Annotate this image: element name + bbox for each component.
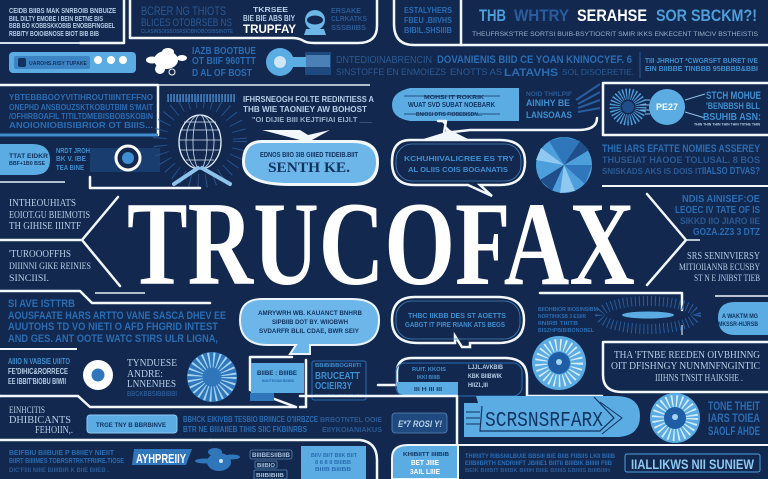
bubble: blue callout xyxy=(392,88,597,140)
small blue tab: TTAT EIDKR xyxy=(9,154,49,160)
bottom row serif xyxy=(9,405,73,436)
outlined box: BOCIIBIBHBIBOBABS xyxy=(315,393,363,398)
panel: bottom light tab: BET JIIIE xyxy=(411,460,439,467)
blue tab: right: A WAKTM MG xyxy=(722,314,758,320)
blue tab: right: MKSSR-HIJRSB xyxy=(718,322,759,328)
hatch bar xyxy=(166,94,235,102)
panel: starburst and node xyxy=(603,83,768,135)
button: TRGE TNY B BBRBINVE xyxy=(96,422,167,429)
bubble: bottom dark: GABGT IT PIRE RIANK ATS BEGS xyxy=(405,320,505,329)
intro text row: ENOTTS AS xyxy=(450,67,502,77)
small blue text and ring icon: TEA BINE xyxy=(56,165,84,172)
bottom right paragraph xyxy=(465,454,616,474)
bottom row texts: BRBOTNTEL OOIE xyxy=(320,415,382,424)
headline: SERAHSE xyxy=(577,6,647,25)
bottom row texts: EIIYKOIANIAKUS xyxy=(322,425,382,434)
outlined box xyxy=(0,358,602,407)
panel: starburst and node: BSUHIB ASN: xyxy=(703,112,761,123)
icon: lower radial dial xyxy=(650,393,700,443)
small text with ellipse and rays: IINIRB TIIITB xyxy=(538,321,578,327)
top box: right text stack: ESTALYHERS xyxy=(404,6,453,15)
left blue paragraph: AUUTOHS TD VO NIETI O AFD FHGRID INTEST xyxy=(8,321,218,333)
icon: white ring xyxy=(83,360,113,390)
bottom row serif: FEHOIIN,. xyxy=(35,425,73,436)
top panel: Trupfay: SSSBIIBS xyxy=(331,25,366,32)
serif label stack: LNNENHES xyxy=(127,378,176,390)
small blue tab: BBF+1B0 BSE xyxy=(9,161,46,167)
icon: node with chart xyxy=(266,48,331,76)
serif label stack xyxy=(127,357,177,398)
badge: Ayhpreiiy: AYHPREIIY xyxy=(136,451,186,466)
headline: THEUFRSKS'TRE SORTSI BUIB-BSYTIOCRIT SMIR IKKS ENKECENT TIMCIV BSTHEISTIS xyxy=(472,31,759,38)
icon: white splat xyxy=(146,48,187,75)
left chevron with text: EOIOT.GU BIEIMOTIS xyxy=(9,210,90,221)
left chevron with text: TH GIHISE IIINTF xyxy=(9,221,81,232)
bottom row serif: DHIBICANTS xyxy=(9,415,71,426)
top-left text panel: RBBITY BOIOIBNOSE BIOT BIB BIB xyxy=(9,31,99,38)
icon: upper radial dial xyxy=(532,336,586,390)
bottom row texts xyxy=(183,415,382,434)
bubble: Senth Ke: SENTH KE. xyxy=(268,160,350,176)
top panel: Trupfay: CLASINSOISBOSRSIOBNOBOSIBSINOTE xyxy=(141,29,234,35)
small text with ellipse and rays: BIIOHBIOR IIIOSINSIBM xyxy=(538,307,598,313)
small text with ellipse and rays: NORTIHIKSB 3 ESIIR xyxy=(538,314,586,320)
outlined tag stack: BIIBIO xyxy=(257,463,275,469)
small blue text left lower: EE IBBIT'BIOBU BIWII xyxy=(8,377,66,386)
blue rectangle: 8 8 8 8 BIIIBB xyxy=(315,460,351,466)
pie chart xyxy=(536,137,592,193)
blue tab: right xyxy=(715,296,768,335)
blue stack right xyxy=(708,399,760,438)
serif label stack: TYNDUESE xyxy=(127,357,177,369)
small blue text left lower: AIIIO N VABSIE UIIITO xyxy=(8,357,70,366)
bubble: blue callout: WUAT SVD SUBAT NOEBARK xyxy=(408,102,495,109)
small blue text and ring icon xyxy=(56,146,160,172)
rounded box with labels: LJJL.AVKBIB xyxy=(468,364,503,371)
right chevron with text: NDIS AINISEF:OE xyxy=(682,194,760,205)
icon: globe with propeller xyxy=(90,101,240,188)
small blue text and ring icon: BK V. IBE xyxy=(56,156,86,163)
small blue text and ring icon: NRDT JROH xyxy=(56,148,90,155)
bubble: dark outlined xyxy=(392,140,525,196)
blue text trio: OT BIIF 960TTT xyxy=(192,56,256,67)
blue rectangle: BIIIB BIIIBB xyxy=(315,467,352,473)
blue text beside callout: NOID THRLPIF xyxy=(526,92,572,98)
left text panel: ANOIONIOBISIBRIOR OT BIIIS... xyxy=(9,120,153,130)
bubble: blue callout: MOHSI IT ROKRIK xyxy=(424,95,485,101)
intro text row xyxy=(336,52,758,79)
right text block: THUSEIAT HAOOE TOLUSAL. 8 BOS xyxy=(602,155,760,166)
headline: WHTRY xyxy=(514,6,570,25)
badge: Ayhpreiiy xyxy=(132,449,192,466)
blue text trio xyxy=(192,46,256,79)
left info bar: UAROHS.RISY TUPAKE xyxy=(29,61,88,67)
outlined tag stack: BIIIBESIIBIIB xyxy=(252,453,291,459)
left info bar xyxy=(9,52,136,73)
rounded box with labels: III H III III xyxy=(414,387,443,393)
rounded box with labels: IKKI BIIIB xyxy=(417,375,440,381)
intro text row: SOL DISOERETIE. xyxy=(562,68,634,77)
bottom row serif: EINHCITIS xyxy=(9,405,45,415)
top panel: Trupfay: TKRSEE xyxy=(253,7,288,14)
outlined box: BRUCEATT xyxy=(315,371,360,382)
left text panel: /OFHIRBOAFIL TITILTDMEBISBOBSKOBIN xyxy=(9,111,153,121)
top-left text panel: CEIDB BIIBS MAK SNRBOIB BNBUIZE xyxy=(9,8,116,15)
left chevron with text: 'TUROOOFFHS xyxy=(9,249,71,260)
bottom left text: BEIFBIU BIIBUIE P B8IIEY NIEIIT xyxy=(9,450,115,457)
intro text row: DOVANIENIS BIID CE YOAN KNINOCYEF. 6 xyxy=(437,54,632,66)
left blue paragraph: AOUSFAATE HARS ARTTO VANE SASCA DHEV EE xyxy=(8,310,226,322)
headline: THB xyxy=(479,6,506,25)
bubble: dark outlined: KCHUHIIVALICREE ES TRY xyxy=(404,154,514,163)
bubble: bottom dark: THBC IIKBB DES ST AOETTS xyxy=(408,311,506,320)
arrow banner xyxy=(464,396,640,437)
top panel: Trupfay: BIE BIE ABS BIY xyxy=(243,14,296,23)
right text block xyxy=(602,143,768,186)
bottom right paragraph: THIRIITY RIBSNILBUIE BBSIII BIE BIIB FIIBIIS LKII BIIIB xyxy=(465,454,616,460)
caption text: "OI DIJIE BIII KEJTIFIAI EIJI.T ___ xyxy=(252,115,373,124)
icon: head xyxy=(304,10,326,35)
caption text: THB WIE TAONIEY AW BOHOST xyxy=(243,105,367,114)
button xyxy=(87,415,177,433)
bubble: blue callout: BNIOSI DTIS FIOBEBISDN... xyxy=(416,112,483,118)
angled panel with light box: BIIOTEIINIKBIIBIB xyxy=(262,378,294,383)
serif label stack: BBCKBBSIBBIBBI xyxy=(127,391,177,398)
panel: bottom light tab xyxy=(392,445,768,479)
left text panel: YBTEBBBOOYVITIHROUTIIINTEFFNO xyxy=(9,92,153,102)
blue text beside callout: AINIHY BE xyxy=(526,98,570,108)
panel: right serif text: OIT DFISHNGY NUNMNFNGINTIC xyxy=(611,361,760,372)
blue rectangle: BIIV BIIT BIIK BIIT xyxy=(311,453,357,459)
left chevron with text: SINCIISI. xyxy=(9,274,49,284)
node circle: PE27 xyxy=(656,102,678,112)
left chevron with text: INTHEOUHIATS xyxy=(9,198,76,209)
left chevron with text xyxy=(0,182,120,286)
caption text: IFHRSNEOGH FOI.TE REDINTIESS A xyxy=(243,94,374,104)
intro text row: DNTEDIOINABRENCIN xyxy=(336,55,432,66)
blue text trio: D AL OF BOST xyxy=(192,68,252,79)
icon: large starburst xyxy=(187,352,237,402)
bottom left text xyxy=(9,450,124,474)
rounded box with labels xyxy=(300,363,522,445)
intro text row: EIN BIIBBE TINBBB 95BBBB&BBI xyxy=(645,64,758,73)
angled panel with light box: BIIBE : BIIIBE xyxy=(257,371,297,377)
left text panel: ONEPHD ANSBOUZSKTKOBUTBIM S'MAIT xyxy=(9,102,154,112)
outlined box: BBIBIBBOGRIITI xyxy=(315,363,361,369)
top panel: Trupfay: BCRER NG THIOTS xyxy=(141,4,226,18)
intro text row: SINSTOFFE EN ENMOIEZS xyxy=(336,67,446,77)
small blue text left lower: FE'DIHIC&RORRECE xyxy=(8,367,68,376)
bottom left text: BIIRT BIIIIMES TOBRSRTRKTFRIIRE.TIOSE xyxy=(9,458,124,465)
bottom row texts: BTR NE BIIIAIIEB TIHIS SIIC FKBINRBS xyxy=(183,425,308,434)
outlined box: OCIEIR3Y xyxy=(315,381,352,392)
caption text xyxy=(243,94,374,124)
right chevron with text xyxy=(647,194,760,285)
bubble: dark outlined: AL OLIIS COIS BOGANATIS xyxy=(408,167,508,174)
top-left text panel: BIIL DILTY EMOBE I BEIN BETNE BIS xyxy=(9,16,103,23)
bubble: bottom blue xyxy=(240,299,379,354)
top box: right text stack xyxy=(394,0,768,45)
top box: right text stack: BIBIL.SHSIIIB xyxy=(404,26,452,35)
left blue paragraph: SI AVE ISTTRB xyxy=(8,298,75,310)
arrow banner: SCRSNSRFARX xyxy=(485,410,603,433)
small blue tab xyxy=(0,144,50,175)
bubble: bottom dark xyxy=(392,297,524,347)
outlined tag stack: BIIBIBIIB xyxy=(256,473,284,479)
bottom right paragraph: EIIBIIBRTH ENDRIIIFT JBIIIE1 BIITII BIIIBIK BIIIIII FIIB xyxy=(465,461,613,467)
rounded box with labels: HIIZI.,III xyxy=(468,382,488,389)
badge xyxy=(392,413,447,433)
small text with ellipse and rays: BISZHPBIBIBONOBEL xyxy=(538,328,595,334)
node circle xyxy=(649,89,685,125)
right chevron with text: SIKKD IIO JIARO IIE xyxy=(680,216,760,226)
blue text beside callout: LANSOAAS xyxy=(526,110,572,120)
panel: bottom light tab: 3AIL LIIIE xyxy=(410,469,440,476)
bottom divider xyxy=(0,440,377,479)
headline xyxy=(472,6,759,38)
panel: bottom light tab: KHIBIITT IIIIBIB xyxy=(403,452,449,458)
bubble: Senth Ke xyxy=(242,130,379,186)
outlined tag stack xyxy=(250,450,292,479)
top panel: Trupfay: TRUPFAY xyxy=(243,22,296,36)
top-left text panel: BBB BO KOBBSKKOBIB ENOBBFINGBEL xyxy=(9,23,116,30)
badge: E*7 ROSI Y! xyxy=(398,419,442,429)
intro text row: LATAVHS xyxy=(504,67,558,79)
blue text beside callout xyxy=(526,84,600,120)
rounded box with labels: KBK BIIBWIK xyxy=(468,373,502,380)
left chevron with text: DIIINNI GIKE REINIES xyxy=(9,262,91,272)
top box: right text stack: FBEU .BIIVHS xyxy=(404,16,453,25)
small blue text left lower xyxy=(8,357,70,386)
bottom row texts: BBHCK EIKIVBB TESBIO BRIINCE O'IIRBZCE xyxy=(183,415,319,424)
bottom right paragraph: BEIK BIIIBIT BIIIBK BIIIIH BIIIE BIIIIIS EBIIIIS BIIIBIIIH xyxy=(465,468,610,474)
panel: starburst and node: THIN THIN THIN THIN THIN TIITHE THIN xyxy=(694,122,760,126)
right text block: SNISKADS AKS IS DOIS IT xyxy=(602,166,703,176)
bubble: bottom blue: SVDARFR BLIL CDAE, BWR SEIY xyxy=(259,328,360,335)
angled panel with light box xyxy=(0,357,306,407)
left text panel xyxy=(0,85,370,135)
bubble: bottom blue: AMRYWRH WB. KAUANCT BNHRB xyxy=(258,310,362,317)
panel: right serif text xyxy=(603,342,768,392)
small text with ellipse and rays xyxy=(538,293,696,335)
top panel: Trupfay: BLICES OTOBRSEB NS xyxy=(141,17,232,29)
top panel: Trupfay: CLRKATKS xyxy=(331,16,367,23)
top-left text panel xyxy=(0,0,124,43)
bubble: bottom blue: SIPBIIB DOT BY. WIIOBWH xyxy=(272,320,348,326)
icon: starburst xyxy=(615,94,641,120)
blue rectangle xyxy=(301,446,366,479)
bubble: Senth Ke: EDNOS BIIO 3IB GIIIED TIIDEIB.BIIT xyxy=(260,152,359,159)
left blue paragraph xyxy=(0,291,226,349)
top panel: Trupfay xyxy=(130,0,377,43)
left blue paragraph: AND GES. ANT OOTE WATC STIRS ULR LIGNA, xyxy=(8,333,218,345)
bottom left text: DIC'FIIII NIIIE BIIIIBIR K BIIE BIIEB . xyxy=(9,468,109,474)
blue text trio: IAZB BOOTBUE xyxy=(192,46,256,57)
top panel: Trupfay: ERSAKE xyxy=(331,8,361,15)
icon: map blob xyxy=(195,448,240,471)
serif label stack: ANDRE: xyxy=(127,368,163,380)
rounded box with labels: RUIT. KKOIS xyxy=(412,367,446,373)
